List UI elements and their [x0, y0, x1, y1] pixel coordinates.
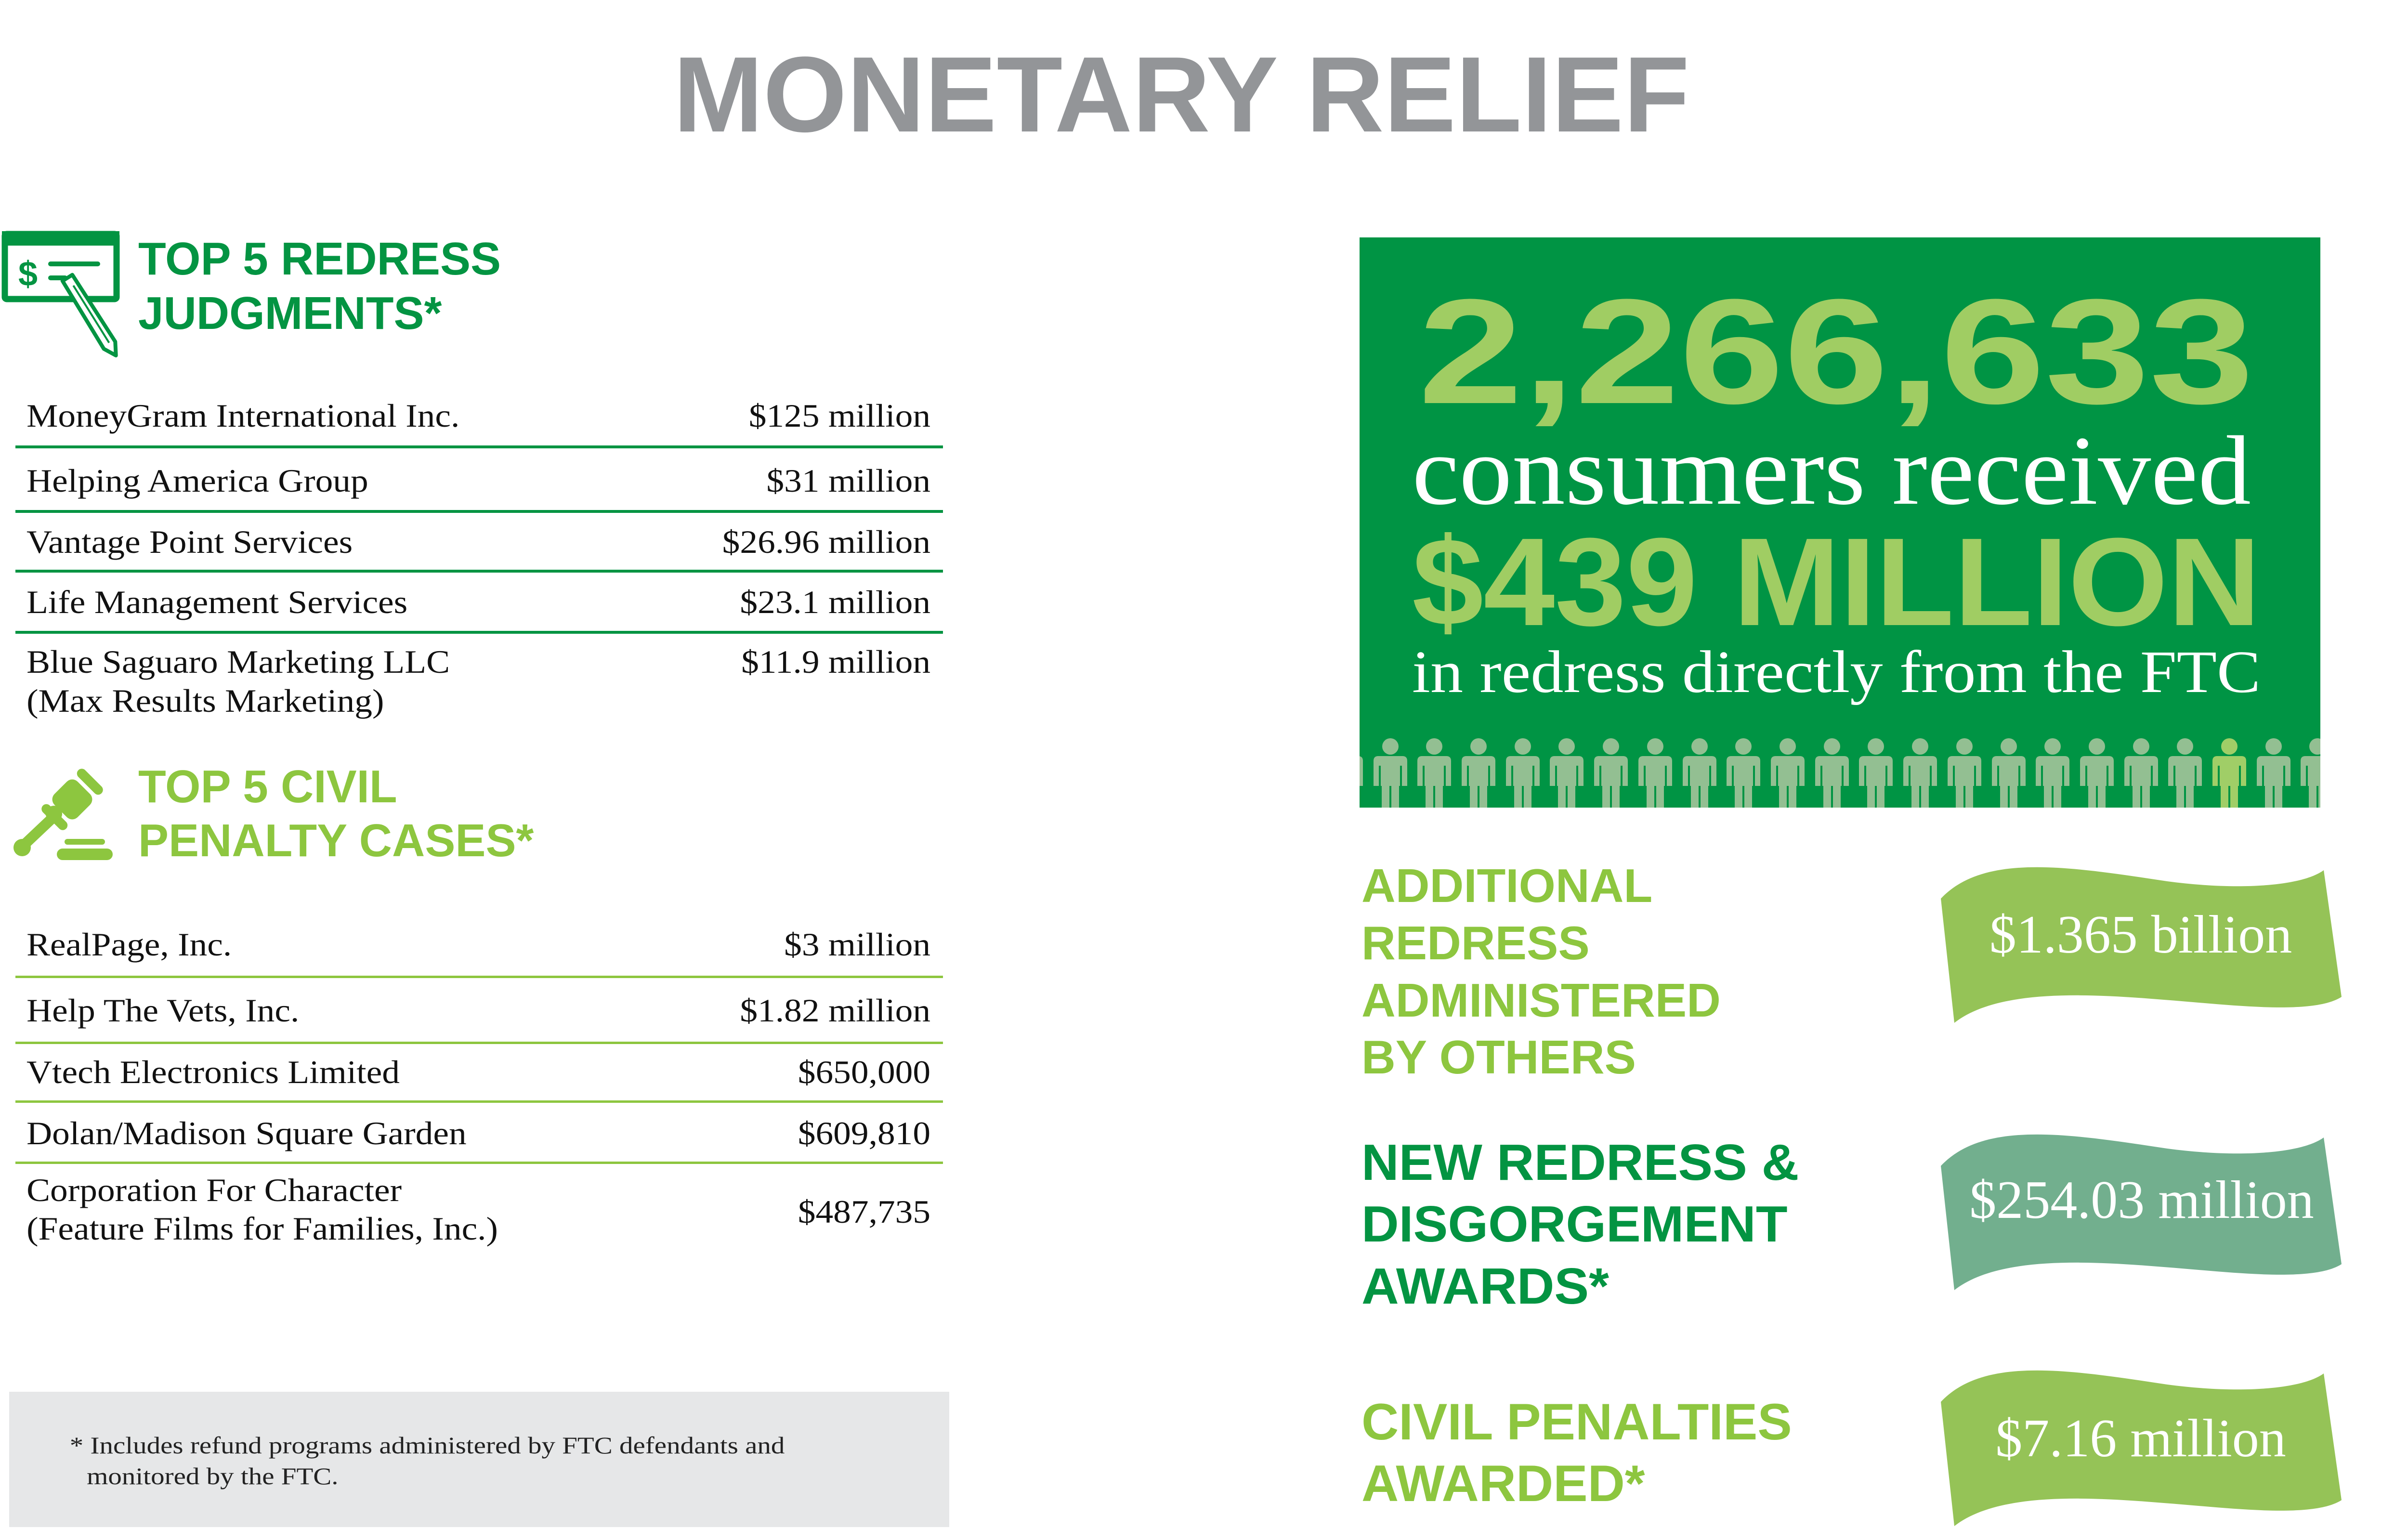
ribbon: $7.16 million — [1941, 1371, 2342, 1526]
big number: 2,266,633 — [1418, 268, 2254, 435]
row: Help The Vets: $1.82 million — [740, 993, 930, 1029]
heading: top 5 redress judgments — [138, 233, 501, 339]
row: Blue Saguaro: Blue Saguaro Marketing LLC — [26, 644, 450, 680]
row: Vtech: Vtech Electronics Limited — [26, 1054, 400, 1090]
row: Vantage Point Services: $26.96 million — [722, 524, 930, 560]
footnote box: * Includes refund programs administered by FTC defendants and — [70, 1432, 785, 1459]
row: Helping America Group: Helping America Group — [26, 463, 368, 499]
row: Help The Vets — [26, 993, 930, 1029]
row: Vantage Point Services: Vantage Point Services — [26, 524, 353, 560]
label: additional redress: REDRESS — [1361, 916, 1590, 969]
label: additional redress — [1361, 859, 1721, 1084]
row: Help The Vets: Help The Vets, Inc. — [26, 993, 299, 1029]
row: Life Management Services — [26, 584, 930, 620]
panel: consumers received box — [1329, 237, 2334, 808]
label: additional redress: ADMINISTERED — [1361, 974, 1721, 1027]
label: new redress & disgorgement awards: DISGORGEMENT — [1361, 1195, 1788, 1253]
table: redress judgments — [15, 398, 943, 719]
row: MoneyGram: MoneyGram International Inc. — [26, 398, 459, 434]
row: RealPage: RealPage, Inc. — [26, 927, 232, 963]
footnote box — [9, 1392, 949, 1527]
row: Blue Saguaro: $11.9 million — [741, 644, 930, 680]
row: Vtech — [26, 1054, 930, 1090]
row: Dolan: Dolan/Madison Square Garden — [26, 1115, 467, 1151]
row: Life Management Services: $23.1 million — [740, 584, 930, 620]
row: RealPage — [26, 927, 930, 963]
row: Helping America Group: $31 million — [766, 463, 930, 499]
row: MoneyGram — [26, 398, 930, 434]
row: Corporation For Character — [26, 1172, 930, 1247]
ribbon: $7.16 million: $7.16 million — [1995, 1409, 2286, 1468]
ribbon: $1.365 billion — [1941, 867, 2342, 1023]
label: civil penalties awarded: CIVIL PENALTIES — [1361, 1393, 1792, 1451]
footnote box: monitored by the FTC. — [87, 1463, 339, 1490]
label: additional redress: ADDITIONAL — [1361, 859, 1652, 912]
heading: top 5 redress judgments: TOP 5 REDRESS — [138, 233, 501, 285]
row: Corporation For Character: $487,735 — [798, 1194, 930, 1230]
row: Corporation For Character: (Feature Films for Families, Inc.) — [26, 1211, 498, 1247]
row: Dolan — [26, 1115, 930, 1151]
people row — [1329, 738, 2334, 808]
label: new redress & disgorgement awards: AWARDS* — [1361, 1257, 1609, 1315]
icon: check with pencil — [2, 231, 122, 359]
row: Helping America Group — [26, 463, 930, 499]
row: Corporation For Character: Corporation For Character — [26, 1172, 402, 1208]
ribbon: $254.03 million — [1941, 1135, 2342, 1290]
table: civil penalty cases — [15, 927, 943, 1247]
label: civil penalties awarded: AWARDED* — [1361, 1454, 1645, 1512]
text: in redress directly: in redress directly from the FTC — [1412, 639, 2261, 706]
icon: gavel — [13, 767, 113, 860]
title: MONETARY RELIEF — [673, 35, 1689, 155]
heading: top 5 redress judgments: JUDGMENTS* — [138, 288, 442, 339]
ribbon: $254.03 million: $254.03 million — [1969, 1170, 2314, 1230]
big amount: $439 MILLION — [1412, 512, 2261, 652]
heading: top 5 civil penalty cases: TOP 5 CIVIL — [138, 761, 397, 812]
label: new redress & disgorgement awards — [1361, 1134, 1799, 1315]
heading: top 5 civil penalty cases — [138, 761, 534, 866]
row: Life Management Services: Life Management Services — [26, 584, 407, 620]
row: Vtech: $650,000 — [798, 1054, 930, 1090]
label: civil penalties awarded — [1361, 1393, 1792, 1512]
row: Dolan: $609,810 — [798, 1115, 930, 1151]
row: Blue Saguaro: (Max Results Marketing) — [26, 683, 384, 719]
row: MoneyGram: $125 million — [749, 398, 930, 434]
icon: check with pencil: $ — [18, 255, 38, 293]
label: new redress & disgorgement awards: NEW REDRESS & — [1361, 1134, 1799, 1191]
label: additional redress: BY OTHERS — [1361, 1031, 1636, 1084]
row: RealPage: $3 million — [784, 927, 930, 963]
row: Blue Saguaro — [26, 644, 930, 719]
ribbon: $1.365 billion: $1.365 billion — [1989, 905, 2292, 965]
text: consumers received: consumers received — [1412, 416, 2251, 525]
row: Vantage Point Services — [26, 524, 930, 560]
heading: top 5 civil penalty cases: PENALTY CASES* — [138, 815, 534, 866]
